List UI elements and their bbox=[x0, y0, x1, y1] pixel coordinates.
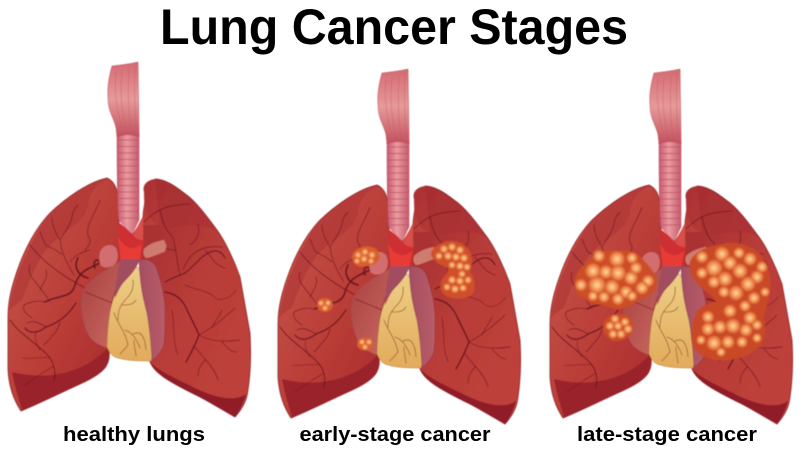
label: late-stage cancer: late-stage cancer bbox=[577, 424, 757, 446]
lungs illustration: healthy bbox=[8, 62, 251, 417]
title: Lung Cancer Stages bbox=[160, 0, 628, 55]
tumours: early stage bbox=[317, 241, 475, 350]
tumours: late stage bbox=[574, 243, 770, 360]
label: healthy lungs: healthy lungs bbox=[63, 424, 205, 446]
lungs illustration: early stage bbox=[278, 69, 521, 424]
panel: healthy lungs bbox=[8, 62, 251, 446]
lungs illustration: late stage bbox=[550, 69, 793, 424]
panel: late-stage cancer bbox=[550, 69, 793, 446]
label: early-stage cancer: early-stage cancer bbox=[300, 424, 491, 446]
panel: early-stage cancer bbox=[278, 69, 521, 446]
